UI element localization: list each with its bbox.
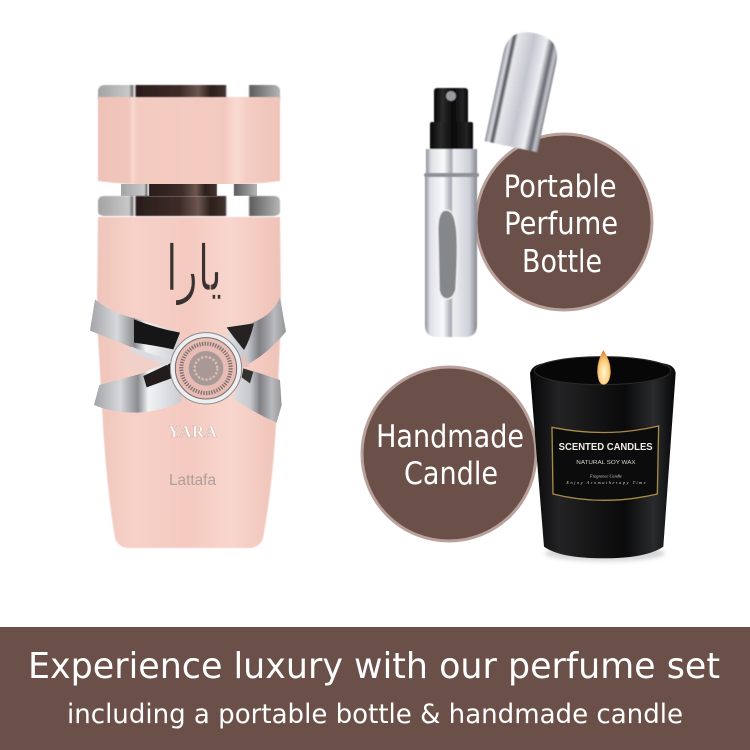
portable spray bottle — [424, 88, 479, 337]
banner headline: Experience luxury with our perfume set — [28, 646, 720, 687]
bottle neck — [121, 184, 257, 196]
Lattafa wordmark: Lattafa — [169, 472, 216, 489]
silver neck — [426, 149, 477, 177]
flame — [597, 350, 611, 385]
bottle cap — [98, 97, 280, 186]
candle label: Enjoy Aromatherapy Time — [565, 480, 646, 485]
bottle cap band — [98, 85, 280, 100]
badge: portable perfume bottle — [476, 134, 652, 310]
badge: handmade candle — [362, 367, 536, 541]
perfume bottle: Yara — [90, 85, 286, 548]
YARA wordmark: YARA — [168, 422, 218, 441]
silver body — [425, 177, 477, 337]
candle jar — [530, 350, 676, 561]
spray head — [434, 88, 468, 124]
window — [438, 210, 458, 299]
candle label: Fragrance Candle — [589, 473, 622, 478]
bottle collar — [98, 196, 280, 216]
badge label: Handmade — [376, 419, 524, 455]
badge label: Candle — [404, 456, 498, 492]
badge label: Perfume — [504, 206, 618, 242]
spray bottle cap — [485, 28, 561, 152]
round seal — [170, 333, 242, 404]
badge label: Bottle — [522, 244, 602, 280]
bottom banner — [0, 627, 750, 750]
candle label: SCENTED CANDLES — [559, 442, 653, 453]
candle label — [552, 426, 659, 500]
candle label: NATURAL SOY WAX — [576, 460, 636, 466]
bottle body — [97, 217, 281, 548]
banner subheading: including a portable bottle & handmade candle — [67, 699, 683, 730]
badge label: Portable — [504, 169, 617, 205]
crossing silver ribbons — [90, 297, 286, 423]
spray collar — [430, 122, 473, 152]
Arabic logo: يارا — [166, 232, 222, 305]
